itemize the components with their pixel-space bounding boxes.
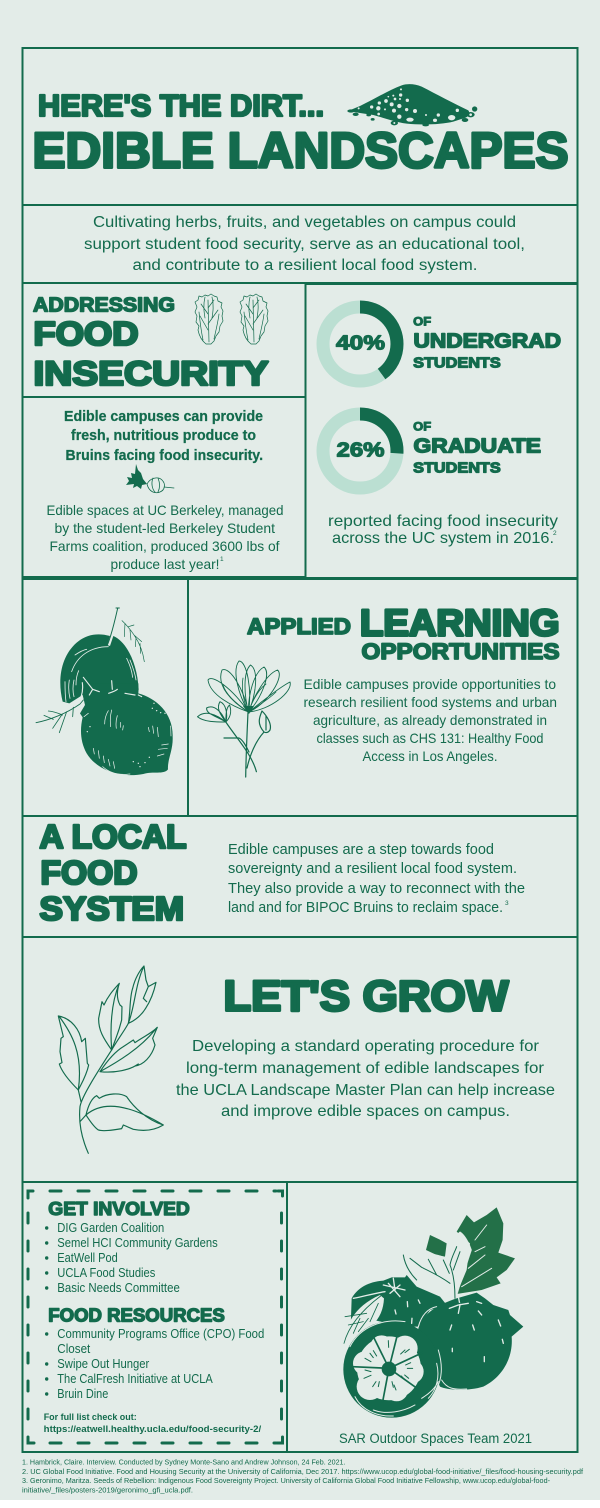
list: food resources: Community Programs Office (CPO) Food — [57, 1327, 264, 1341]
heading: a local food system — [40, 818, 186, 927]
text: local food system paragraph: sovereignty and a resilient local food system. — [228, 860, 517, 877]
dashed frame — [28, 1191, 282, 1443]
icon: fruit cluster — [343, 1207, 523, 1418]
panel: resources — [22, 1182, 287, 1452]
chart: donut 26 percent — [323, 414, 397, 488]
list: get involved: UCLA Food Studies — [57, 1266, 155, 1280]
text: applied learning paragraph: research resilient food systems and urban — [304, 694, 557, 710]
icon: lettuce right — [240, 294, 268, 344]
icon: lettuce left — [195, 294, 223, 344]
text: local food system paragraph: They also provide a way to reconnect with the — [228, 880, 525, 897]
text: of graduate students — [413, 420, 541, 477]
text: berkeley paragraph: Farms coalition, produced 3600 lbs of — [50, 538, 280, 554]
text: team credit: SAR Outdoor Spaces Team 2021 — [339, 1431, 532, 1446]
chart: donut 40 percent: 40% — [336, 332, 385, 354]
list: food resources — [45, 1327, 264, 1401]
list: food resources: Swipe Out Hunger — [57, 1357, 149, 1371]
heading: insecurity: INSECURITY — [34, 355, 269, 393]
text: intro statement — [84, 214, 525, 274]
panel: lemons illustration — [22, 579, 188, 816]
panel: let's grow — [22, 937, 578, 1182]
heading: food resources: FOOD RESOURCES — [48, 1304, 225, 1325]
heading: a local food system: FOOD — [40, 854, 138, 891]
panel: statistics — [306, 284, 578, 578]
chart: donut 40 percent — [323, 307, 397, 381]
text: let's grow paragraph: and improve edible spaces on campus. — [221, 1103, 510, 1120]
text: let's grow paragraph — [176, 1038, 555, 1120]
heading: opportunities: OPPORTUNITIES — [362, 639, 560, 664]
text: berkeley paragraph: by the student-led Berkeley Student — [54, 520, 275, 536]
heading: a local food system: SYSTEM — [40, 890, 184, 927]
text: reported food insecurity: reported facing food insecurity — [328, 513, 558, 530]
heading: get involved: GET INVOLVED — [48, 1198, 190, 1219]
list: get involved: EatWell Pod — [57, 1251, 118, 1265]
text: intro statement: and contribute to a resilient local food system. — [132, 257, 478, 274]
text: local food system paragraph — [228, 841, 525, 916]
text: applied learning paragraph: Access in Los Angeles. — [362, 748, 498, 764]
list: food resources: Closet — [57, 1342, 91, 1356]
text: applied learning paragraph: classes such as CHS 131: Healthy Food — [316, 730, 544, 746]
text: footnotes: initiative/_files/posters-2019/geronimo_gfi_ucla.pdf. — [22, 1488, 193, 1494]
text: footnotes: 3. Geronimo, Maritza. Seeds of Rebellion: Indigenous Food Sovereignty Project. University of California Global Food Initiative Fellowship, www.ucop.edu/global-food- — [22, 1478, 551, 1485]
list: get involved: Basic Needs Committee — [57, 1281, 180, 1295]
text: let's grow paragraph: Developing a standard operating procedure for — [192, 1038, 540, 1055]
text: full list link — [44, 1412, 262, 1435]
text: bold statement — [64, 409, 263, 464]
panel: edible campuses body — [22, 397, 306, 577]
list: get involved — [45, 1221, 218, 1295]
text: bold statement: fresh, nutritious produce to — [71, 428, 256, 444]
icon: flower — [198, 661, 290, 777]
text: berkeley paragraph: produce last year! — [110, 556, 220, 572]
list: get involved: Semel HCI Community Gardens — [57, 1236, 218, 1250]
text: of graduate students: STUDENTS — [413, 461, 501, 477]
list: food resources: Bruin Dine — [57, 1387, 108, 1401]
text: berkeley paragraph — [46, 502, 284, 572]
icon: leafy branch — [58, 966, 163, 1153]
panel: team credit — [287, 1182, 578, 1452]
text: full list link: For full list check out: — [44, 1412, 137, 1423]
text: of undergrad students: STUDENTS — [413, 356, 501, 372]
heading: edible landscapes: EDIBLE LANDSCAPES — [32, 122, 568, 178]
heading: let's grow: LET'S GROW — [224, 974, 509, 1020]
panel: addressing food insecurity heading — [22, 283, 306, 397]
text: bold statement: Edible campuses can provide — [64, 409, 263, 425]
text: of graduate students: OF — [413, 420, 431, 434]
heading: a local food system: A LOCAL — [40, 818, 186, 855]
text: applied learning paragraph — [304, 676, 557, 764]
heading: food: FOOD — [34, 315, 138, 352]
text: let's grow paragraph: the UCLA Landscape Master Plan can help increase — [176, 1082, 555, 1099]
text: footnotes: 2. UC Global Food Initiative. Food and Housing Security at the University of California, Dec 2017. https://www.ucop.edu/global-food-initiative/_files/food-housing-security.pdf — [22, 1469, 583, 1476]
text: berkeley paragraph: 1 — [220, 556, 224, 563]
text: footnotes — [22, 1460, 583, 1494]
heading: learning: LEARNING — [360, 602, 560, 644]
panel: a local food system — [22, 816, 578, 937]
panel: intro — [22, 205, 578, 283]
list: food resources: The CalFresh Initiative at UCLA — [57, 1372, 213, 1386]
text: applied learning paragraph: Edible campuses provide opportunities to — [304, 676, 556, 692]
text: local food system paragraph: land and for BIPOC Bruins to reclaim space. — [228, 899, 503, 916]
text: reported food insecurity: 2 — [553, 530, 557, 537]
text: of undergrad students: OF — [413, 314, 431, 328]
text: of undergrad students — [413, 314, 561, 372]
text: reported food insecurity — [328, 513, 558, 547]
heading: here's the dirt: HERE'S THE DIRT... — [38, 89, 324, 123]
text: applied learning paragraph: agriculture, as already demonstrated in — [313, 712, 547, 728]
text: let's grow paragraph: long-term management of edible landscapes for — [186, 1060, 545, 1077]
icon: soil mound — [347, 84, 477, 126]
panel: title — [22, 48, 578, 205]
panel: applied learning — [188, 579, 578, 816]
icon: beet — [126, 464, 174, 493]
text: intro statement: Cultivating herbs, fruits, and vegetables on campus could — [93, 214, 516, 231]
text: full list link: https://eatwell.healthy.ucla.edu/food-security-2/ — [44, 1424, 262, 1435]
heading: applied: APPLIED — [247, 614, 351, 639]
icon: lemons — [36, 608, 173, 775]
text: reported food insecurity: across the UC system in 2016. — [332, 530, 554, 547]
text: of graduate students: GRADUATE — [414, 435, 541, 457]
text: footnotes: 1. Hambrick, Claire. Interview. Conducted by Sydney Monte-Sano and Andrew Johnson, 24 Feb. 2021. — [22, 1460, 346, 1466]
text: of undergrad students: UNDERGRAD — [414, 330, 561, 352]
text: local food system paragraph: Edible campuses are a step towards food — [228, 841, 494, 858]
text: berkeley paragraph: Edible spaces at UC Berkeley, managed — [46, 502, 284, 518]
text: bold statement: Bruins facing food insecurity. — [66, 448, 263, 464]
heading: addressing: ADDRESSING — [33, 294, 175, 316]
text: local food system paragraph: 3 — [505, 900, 509, 907]
chart: donut 26 percent: 26% — [336, 439, 384, 461]
list: get involved: DIG Garden Coalition — [57, 1221, 164, 1235]
text: intro statement: support student food security, serve as an educational tool, — [84, 236, 525, 253]
